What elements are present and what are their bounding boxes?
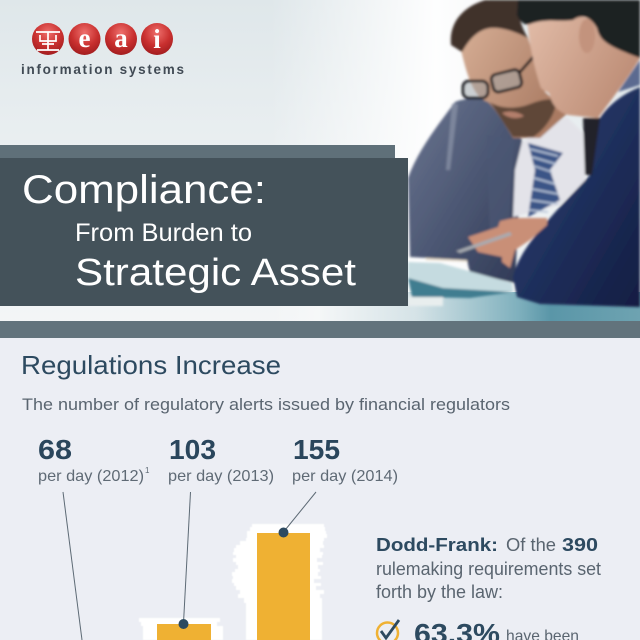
logo: letters: a	[114, 23, 128, 53]
section subheading: The number of regulatory alerts issued by financial regulators	[22, 395, 510, 414]
label: 2014	[292, 434, 398, 485]
label: 2012: 1	[145, 466, 150, 475]
left man's beard	[490, 99, 556, 137]
title: line 3: Strategic Asset	[75, 252, 356, 294]
title: line 2: From Burden to	[75, 219, 252, 247]
Dodd-Frank text block: Dodd-Frank:	[376, 534, 498, 555]
label: 2012	[38, 434, 150, 485]
bar markers	[178, 528, 288, 629]
left man's hair	[451, 0, 528, 52]
Dodd-Frank text block: Of the	[506, 534, 556, 555]
title: line 1: Compliance:	[22, 168, 266, 212]
band under hero	[0, 321, 640, 338]
right man's suit	[513, 87, 640, 307]
title banner	[0, 158, 408, 306]
logo: letters: e	[79, 23, 91, 53]
label: 2012: per day (2012)	[38, 468, 144, 485]
table surface	[320, 292, 640, 322]
label: 2014: 155	[293, 434, 340, 465]
icon: check mark	[377, 620, 399, 640]
Dodd-Frank text block	[376, 534, 601, 602]
statistic: 63.3%	[414, 618, 579, 640]
hero photo: two businessmen	[270, 0, 640, 322]
label: 2014: per day (2014)	[292, 468, 398, 485]
left man's face	[461, 26, 568, 138]
logo: glyph mark	[36, 32, 60, 50]
chart: alerts per day	[38, 434, 398, 640]
section heading: Regulations Increase	[21, 350, 281, 380]
beige background gap	[425, 220, 470, 262]
label: 2013	[168, 434, 274, 485]
hands and pen	[468, 218, 547, 268]
bar: 2013	[157, 624, 211, 640]
leader lines	[63, 492, 316, 640]
Dodd-Frank text block: rulemaking requirements set	[376, 558, 601, 579]
logo: letters: i	[153, 24, 161, 54]
logo: red balls	[32, 23, 173, 55]
bar: 2014	[257, 533, 310, 640]
left man's shirt	[513, 117, 585, 217]
logo	[21, 23, 184, 77]
right man's hair	[517, 0, 640, 58]
Dodd-Frank text block: forth by the law:	[376, 581, 503, 602]
right man's ear	[579, 19, 595, 53]
top strip of title banner	[0, 145, 395, 158]
logo: letters	[79, 23, 161, 54]
label: 2013: 103	[169, 434, 216, 465]
label: 2012: 68	[38, 434, 72, 465]
logo: tagline: information systems	[21, 62, 184, 77]
tablet	[408, 262, 513, 292]
left man's glasses	[463, 55, 535, 98]
right man's face	[527, 15, 640, 118]
left man's suit	[408, 99, 522, 283]
white brush strokes behind bars	[139, 524, 327, 640]
left man's tie	[528, 143, 563, 217]
header background	[0, 0, 640, 338]
Dodd-Frank text block: 390	[562, 534, 598, 555]
label: 2013: per day (2013)	[168, 468, 274, 485]
